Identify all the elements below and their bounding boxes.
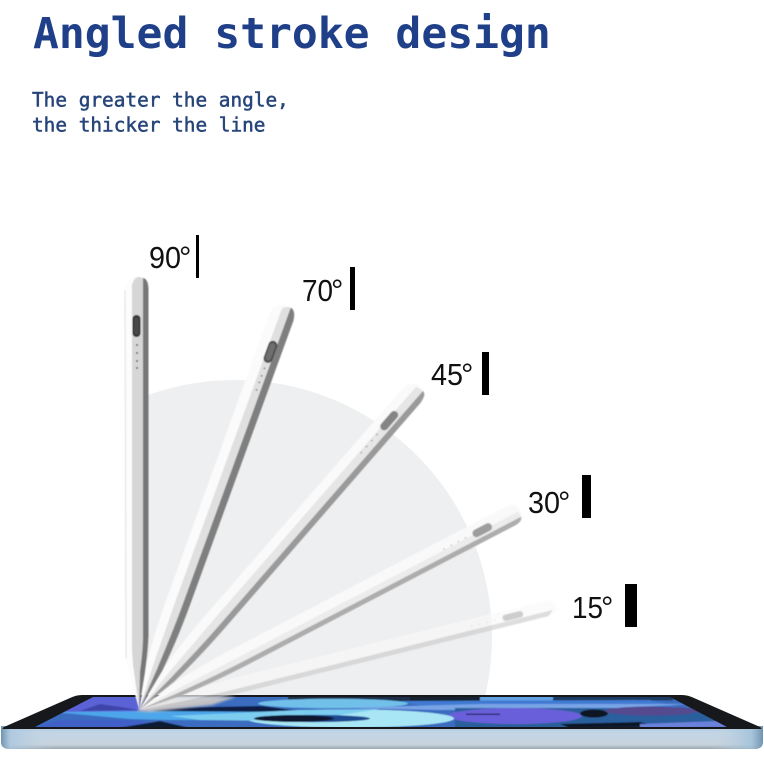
label 90 degrees: °	[179, 240, 191, 275]
label 30 degrees: °	[558, 485, 570, 520]
label 30 degrees	[528, 475, 591, 520]
subtitle text block: The greater the angle,	[32, 88, 289, 112]
pen at 15 degrees	[138, 598, 558, 718]
label 45 degrees: 45	[431, 357, 463, 392]
label 15 degrees: °	[601, 590, 613, 625]
background semicircle	[147, 380, 492, 696]
label 90 degrees	[149, 235, 199, 278]
label 30 degrees: 30	[528, 485, 560, 520]
subtitle text block: the thicker the line	[32, 114, 265, 136]
label 70 degrees: 70	[302, 273, 333, 308]
label 15 degrees: 15	[572, 590, 603, 625]
pen at 90 degrees	[125, 277, 148, 709]
tablet	[1, 695, 763, 749]
subtitle text block	[32, 88, 289, 136]
dots	[256, 367, 265, 391]
pen at 45 degrees	[131, 379, 428, 716]
button	[379, 409, 400, 432]
label 45 degrees: °	[461, 357, 473, 392]
label 90 degrees: 90	[149, 240, 181, 275]
title: Angled stroke design	[33, 9, 551, 59]
dots	[136, 344, 138, 369]
dots	[443, 537, 466, 550]
label 15 degrees	[572, 584, 637, 627]
tablet wallpaper	[30, 696, 735, 728]
button	[502, 610, 524, 622]
button	[262, 340, 279, 364]
tablet metal side	[1, 726, 763, 749]
label 45 degrees	[431, 352, 489, 395]
tablet black bezel	[2, 695, 762, 729]
label 70 degrees	[302, 267, 355, 310]
dots	[471, 620, 496, 627]
pen reflection shadow on tablet	[137, 697, 236, 712]
button	[471, 522, 493, 539]
dots	[360, 434, 378, 454]
label 70 degrees: °	[331, 273, 343, 308]
button	[132, 315, 140, 337]
pen at 70 degrees	[127, 301, 297, 713]
pen at 30 degrees	[135, 502, 525, 718]
